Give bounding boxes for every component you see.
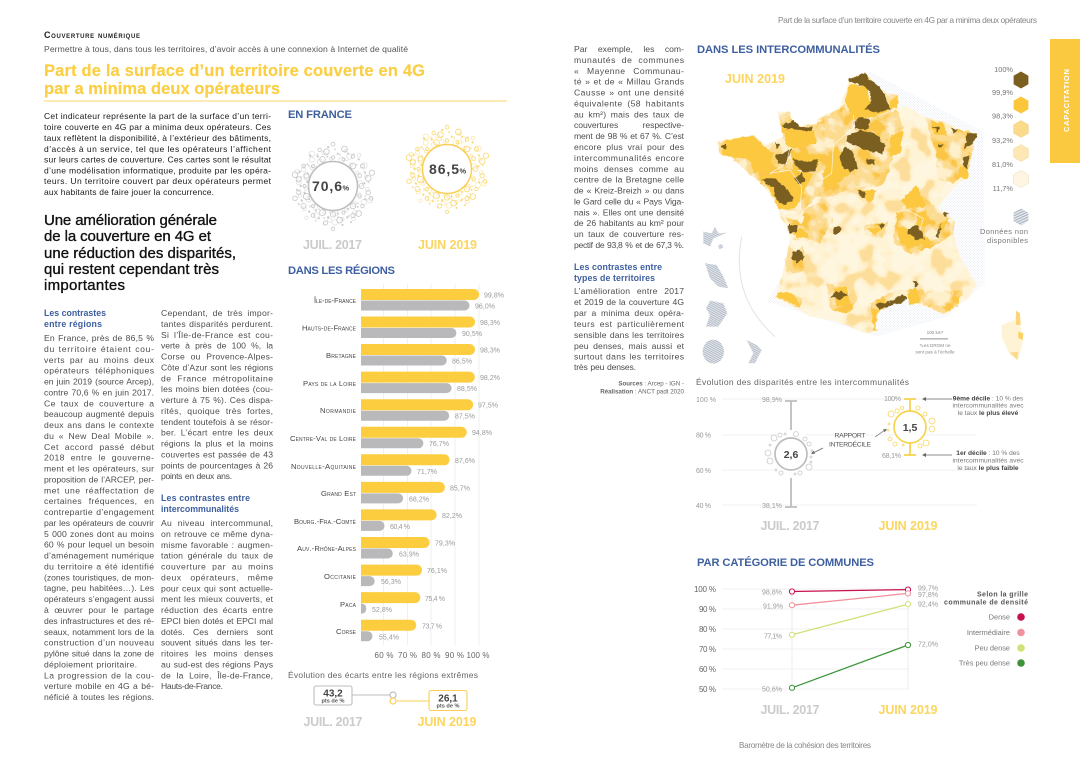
text column 2: Hauts-de-France. (161, 681, 223, 691)
intro paragraph: teurs. Un territoire couvert par deux opérateurs permet (44, 176, 272, 186)
callout: 1er décile: 1er décile : 10 % des (956, 450, 1020, 457)
dumbbell 2017: 38,1% (762, 503, 782, 510)
series: dense: 98,8% (762, 590, 782, 596)
legend item 93.2%: 93,2% (992, 136, 1013, 145)
text column 2: points en deux ans. (161, 471, 232, 481)
text column 3: et 2019 de la couverture 4G (574, 297, 684, 307)
row: Bretagne (326, 344, 500, 366)
dumbbell 2017: 2,6 (784, 449, 798, 461)
row: Centre-Val de Loire (290, 427, 492, 448)
row: Pays de la Loire: 88,5% (457, 386, 477, 393)
text column 2: Corse ou Provence-Alpes- (161, 352, 273, 362)
text column 3: Causse » ont une densité (574, 88, 684, 98)
row: Paca: 52,8% (372, 607, 392, 614)
main heading: une réduction des disparités, (44, 245, 236, 262)
axis labels: 80 % (699, 625, 716, 634)
text column 3: nais ». Elles ont une densité (574, 207, 684, 217)
text column 1: deux ans dans le contexte (44, 420, 154, 430)
text column 3: teurs est particulièrement (574, 319, 685, 329)
date label map: JUIN 2019 (725, 72, 785, 86)
legend item 98.3%: 98,3% (992, 112, 1013, 120)
date label 2017: JUIL. 2017 (760, 519, 820, 533)
text column 1: 60 % pour lequel un besoin (44, 540, 154, 550)
axis labels: 100 % (466, 651, 490, 660)
text column 3 (574, 44, 685, 372)
text column 1: seaux, notamment lors de la (44, 627, 154, 637)
text column 3: le Gard celle du « Pays Viga- (574, 196, 684, 206)
value box 2019: pts de % (436, 704, 460, 710)
axis labels: 70 % (398, 651, 417, 660)
legend item no data: Données non (980, 227, 1028, 236)
line chart legend: Selon la grille (977, 592, 1028, 598)
row: Hauts-de-France (302, 316, 500, 338)
main heading: qui restent cependant très (44, 261, 219, 278)
text column 3: moins denses comme au (574, 164, 684, 174)
text column 2: Au niveau intercommunal, (161, 518, 273, 528)
text column 1: construction d’un nouveau (44, 638, 154, 648)
text column 3: au km²) mais des taux de (574, 109, 684, 119)
text column 1: Les contrastes (44, 308, 106, 318)
axis labels: 60 % (374, 651, 394, 660)
text column 2: de France métropolitaine (161, 373, 273, 383)
text column 3: intercommunalités encore (574, 153, 684, 163)
row: Grand Est: 68,2% (409, 496, 429, 504)
intro paragraph: toire couverte en 4G par a minima deux opérateurs. Ces (44, 122, 271, 132)
row: Nouvelle-Aquitaine: 87,6% (455, 458, 475, 465)
line chart legend (944, 592, 1028, 668)
row: Occitanie: Occitanie (324, 572, 357, 581)
row: Corse: 55,4% (379, 634, 399, 642)
intro paragraph: d’une modélisation informatique, produite par les opéra- (44, 166, 271, 176)
intro paragraph (44, 111, 272, 197)
text column 2: Côte d’Azur sont les régions (161, 362, 273, 372)
text column 3: sensible dans les territoires (574, 330, 684, 340)
footer: Baromètre de la cohésion des territoires (739, 741, 871, 750)
text column 2: souvent situés dans les ter- (161, 638, 273, 648)
legend item no data (980, 208, 1028, 245)
text column 2: couvertes est passée de 43 (161, 449, 273, 459)
heading: intercommunalités: DANS LES INTERCOMMUNALITÉS (697, 43, 881, 56)
text column 1: contrepartie d’engagement (44, 507, 155, 517)
row: Île-de-France (313, 289, 504, 310)
text column 2: tation générale du taux de (161, 551, 273, 561)
text column 2: au sud-est des régions Pays (161, 659, 273, 669)
callout: 1er décile: le taux le plus faible (957, 465, 1019, 472)
series: très peu dense: 50,6% (762, 686, 782, 694)
text column 1: par les opérateurs de couvrir (44, 518, 154, 528)
axis labels: 60 % (699, 665, 716, 674)
axis labels: 70 % (699, 645, 716, 654)
axis labels (374, 651, 490, 660)
text column 3: de « Kreiz-Breizh » ou dans (574, 186, 684, 196)
title: par a minima deux opérateurs (44, 80, 280, 98)
text column 1: Ce taux de couverture a (44, 398, 154, 408)
text column 3: peu denses, mais aussi et (574, 341, 685, 351)
dumbbell 2019 (882, 396, 935, 460)
map scale note (915, 330, 955, 354)
text column 2: verte à près de 100 %, la (161, 341, 273, 351)
legend item 11.7%: 11,7% (993, 184, 1013, 193)
text column 2: rités, quoique très fortes, (161, 406, 273, 416)
text column 2: dotés. Ces derniers sont (161, 627, 274, 637)
intro paragraph: d’accès à un service, tel que les opérateurs l’affichent (44, 144, 272, 154)
text column 2: on retrouve ce même dyna- (161, 529, 273, 539)
row: Bretagne: Bretagne (326, 351, 357, 360)
text column 2 (161, 308, 274, 691)
axis labels: 50 % (699, 685, 716, 694)
map: Corsica (1002, 310, 1023, 360)
legend: dense: Dense (989, 612, 1010, 622)
subheading: écarts: Évolution des écarts entre les régions extrêmes (288, 670, 478, 680)
row: Centre-Val de Loire: Centre-Val de Loire (290, 434, 357, 443)
text column 3: par a minima deux opéra- (574, 308, 684, 318)
text column 2: Les contrastes entre (161, 493, 250, 503)
disparity chart (696, 396, 1024, 510)
date label 2017: JUIL. 2017 (303, 238, 362, 252)
subtitle: Permettre à tous, dans tous les territoires, d’avoir accès à une connexion à Internet de qualité (44, 44, 408, 54)
main heading (44, 212, 236, 294)
callout: rapport interdécile: RAPPORT (834, 432, 866, 440)
text column 1: certaines fréquences, en (44, 496, 154, 506)
date label 2017: JUIL. 2017 (760, 703, 820, 717)
axis labels (696, 397, 716, 510)
value box 2019 (429, 690, 467, 710)
date label 2019: JUIN 2019 (418, 715, 477, 729)
text column 1: pylône situé dans la zone de (44, 648, 154, 658)
intro paragraph: aux habitants de faire jouer la concurrence. (44, 187, 214, 197)
intro paragraph: sur leurs cartes de couverture. Ces cartes sont le résultat (44, 154, 272, 164)
row: Occitanie: 76,1% (427, 568, 447, 575)
axis labels: 90 % (699, 605, 716, 614)
text column 2: Cependant, de très impor- (161, 308, 273, 318)
row: Hauts-de-France: 98,3% (480, 320, 500, 327)
text column 1: Cet accord passé début (44, 442, 155, 452)
callout: 1er décile (922, 450, 1024, 472)
text column 1: met une réaffectation de (44, 485, 154, 495)
intro paragraph: taux reflètent la disponibilité, à l’extérieur des bâtiments, (44, 133, 271, 143)
text column 2: couverture par au moins (161, 562, 273, 572)
running header: Part de la surface d’un territoire couverte en 4G par a minima deux opérateurs (778, 15, 1037, 25)
text column 2: ber. L’écart entre les deux (161, 428, 274, 438)
text column 3: centre de la Bretagne celle (574, 175, 684, 185)
text column 2: ment les mieux couverts, et (161, 594, 274, 604)
map legend (980, 65, 1028, 245)
text column 2: régions la plus et la moins (161, 439, 273, 449)
text column 1: du territoire étaient cou- (44, 344, 154, 354)
heading: catégorie de communes: PAR CATÉGORIE DE COMMUNES (697, 556, 875, 569)
axis labels: 100 % (696, 397, 716, 404)
intro paragraph: Cet indicateur représente la part de la surface d’un terri- (44, 111, 271, 121)
legend: peu dense: Peu dense (975, 644, 1010, 652)
row: Hauts-de-France: Hauts-de-France (302, 324, 357, 332)
row: Centre-Val de Loire: 94,8% (472, 430, 492, 437)
text column 1: en juin 2019 (source Arcep), (44, 376, 154, 386)
text column 2: intercommunalités (161, 504, 239, 514)
text column 3: de 26 habitants au km² pour (574, 218, 684, 228)
text column 3: très peu denses. (574, 362, 636, 372)
text column 1: des infrastructures et des ré- (44, 616, 154, 626)
text column 2: points de pourcentages à 26 (161, 460, 273, 470)
text column 2: pour ceux qui sont actuelle- (161, 583, 273, 593)
text column 1: ment et les opérateurs, sur (44, 464, 154, 474)
heading: dans les régions: DANS LES RÉGIONS (288, 264, 396, 277)
line chart legend: communale de densité (944, 600, 1028, 606)
series: peu dense (764, 602, 938, 640)
legend: très peu dense: Très peu dense (959, 658, 1010, 668)
text column 3: encore plus vrai pour des (574, 142, 684, 152)
row: Bretagne: 86,5% (452, 358, 472, 366)
text column 3: un taux de couverture res- (574, 229, 684, 239)
row: Hauts-de-France: 90,5% (462, 331, 482, 338)
legend: intermédiaire: Intermédiaire (967, 628, 1010, 637)
bar chart: régions (290, 284, 504, 660)
row: Paca: 75,4 % (425, 596, 445, 603)
text column 3: pectif de 93,8 % et de 67,3 %. (574, 240, 684, 250)
map: overseas territories (703, 227, 775, 364)
text column 1: à œuvrer pour le partage (44, 605, 154, 615)
side tab: CAPACITATION (1062, 69, 1071, 132)
legend item 81.0% (992, 160, 1028, 188)
text column 3: surtout dans les territoires (574, 352, 684, 362)
text column 2: misme favorable : augmen- (161, 540, 273, 550)
map scale note: 100 km* (927, 330, 944, 335)
text column 1: néficié à toutes les régions. (44, 692, 154, 702)
row: Centre-Val de Loire: 76,7% (429, 441, 449, 448)
text column 1: contre 70,6 % en juin 2017. (44, 387, 154, 397)
text column 1: (zones touristiques, de mon- (44, 572, 154, 582)
text column 2: tendent toutefois à se résor- (161, 417, 273, 427)
side tab (1050, 39, 1080, 163)
text column 1: tagne, peu habitées…). Les (44, 583, 154, 593)
text column 2: verture à 75 %). Ces dispa- (161, 395, 273, 405)
row: Auvergne-Rhône-Alpes: Auv.-Rhône-Alpes (297, 544, 357, 553)
row: Normandie (320, 399, 498, 421)
text column 1: du « New Deal Mobile ». (44, 431, 154, 441)
value box 2017: pts de % (321, 698, 345, 704)
text column 2: deux opérateurs, même (161, 572, 273, 582)
text column 3: ment de 98 % et 67 %. C’est (574, 131, 685, 141)
row: Auvergne-Rhône-Alpes (297, 537, 455, 558)
legend item 98.3% (992, 112, 1028, 138)
section label: Couverture numérique (44, 30, 140, 40)
callout: 9e décile: 9ème décile : 10 % des (953, 396, 1024, 402)
gauge: juillet 2017 (275, 128, 391, 245)
text column 3: couvertures respective- (574, 120, 684, 130)
series: très peu dense (762, 642, 938, 694)
line chart (694, 585, 938, 694)
text column 1: d’aménagement numérique (44, 551, 154, 561)
text column 1: verts par au moins deux (44, 355, 155, 365)
legend item 99.9% (992, 88, 1028, 114)
text column 2: EPCI bien dotés et EPCI mal (161, 616, 273, 626)
text column 1: beaucoup augmenté depuis (44, 409, 154, 419)
text column 1: entre régions (44, 319, 102, 329)
text column 3: équivalente (58 habitants (574, 98, 684, 108)
map of France (717, 70, 985, 337)
axis labels: 90 % (445, 651, 464, 660)
row: Pays de la Loire: Pays de la Loire (303, 379, 357, 388)
row: Pays de la Loire (303, 372, 500, 393)
row: Normandie: Normandie (320, 406, 357, 415)
row: Paca: Paca (340, 600, 357, 609)
legend item no data: disponibles (987, 236, 1028, 245)
text column 1: En France, près de 86,5 % (44, 333, 154, 343)
subheading: disparités: Évolution des disparités entre les intercommunalités (696, 377, 909, 387)
row: Bourgogne-Franche-Comté: 82,2% (442, 513, 462, 520)
legend item 93.2% (992, 136, 1028, 162)
sources: Sources : Arcep - IGN - (618, 380, 684, 388)
text column 2: Si l’Île-de-France est cou- (161, 330, 273, 340)
dumbbell 2019: 1,5 (903, 422, 917, 434)
gauge: juin 2019: % (460, 166, 466, 176)
row: Corse: Corse (336, 627, 357, 636)
map scale note: sont pas à l’échelle (915, 350, 955, 354)
gauge: juillet 2017: % (342, 184, 350, 192)
callout: 9e décile: intercommunalités avec (952, 402, 1024, 410)
series: peu dense: 77,1% (764, 634, 782, 640)
series: très peu dense: 72,0% (918, 642, 938, 648)
main heading: importantes (44, 277, 125, 294)
row: Bourgogne-Franche-Comté: Bourg.-Fra.-Comté (294, 517, 357, 526)
axis labels: 80 % (696, 432, 711, 440)
text column 1: proposition de l’ARCEP, per- (44, 474, 154, 484)
value box 2017: 43,2 (323, 688, 343, 700)
text column 3: té » et de « Millau Grands (574, 77, 684, 87)
text column 1: verture mobile en 4G a bé- (44, 681, 154, 691)
sources: Réalisation : ANCT padt 2020 (600, 388, 685, 396)
row: Corse (336, 620, 442, 642)
text column 1: 5 000 zones dont au moins (44, 529, 154, 539)
row: Normandie: 87,5% (455, 414, 475, 420)
title: Part de la surface d’un territoire couverte en 4G (44, 62, 425, 80)
row: Grand Est (321, 482, 470, 504)
dumbbell 2019: 100% (884, 396, 901, 403)
text column 1 (44, 308, 155, 702)
gauge: juillet 2017: 70,6 (312, 178, 342, 194)
callout: 9e décile: le taux le plus élevé (958, 410, 1019, 417)
main heading: Une amélioration générale (44, 212, 217, 229)
dumbbell 2017 (762, 397, 815, 510)
text column 2: les moins bien dotées (cou- (161, 384, 273, 394)
text column 1: 2018 entre le gouverne- (44, 453, 154, 463)
row: Nouvelle-Aquitaine: 71,7% (417, 469, 437, 476)
value box 2017 (314, 686, 352, 705)
map scale note: *Les DROM ne (920, 343, 951, 348)
row: Corse: 73,7 % (422, 624, 442, 630)
axis labels: 60 % (696, 468, 711, 475)
callout: 9e décile (922, 396, 1024, 417)
row: Paca (340, 592, 445, 614)
dumbbell 2017: 98,9% (762, 397, 782, 404)
row: Nouvelle-Aquitaine (291, 454, 475, 476)
gauge: juin 2019: 86,5 (429, 161, 459, 177)
text column 3: munautés de communes (574, 55, 684, 65)
series: dense (762, 586, 938, 596)
text column 1: La progression de la cou- (44, 670, 154, 680)
series: intermédiaire: 91,9% (763, 604, 783, 610)
title (44, 62, 425, 98)
heading: en France: EN FRANCE (288, 109, 353, 121)
row: Occitanie: 56,3% (381, 579, 401, 586)
row: Île-de-France: 99,8% (484, 292, 504, 300)
row: Île-de-France: Île-de-France (313, 296, 357, 305)
text column 1: opérateurs téléphoniques (44, 366, 154, 376)
text column 2: réduction des écarts entre (161, 605, 273, 615)
series: dense: 99,7% (918, 586, 938, 592)
legend item 100% (994, 65, 1028, 88)
text column 1: du territoire a été identifié (44, 562, 154, 572)
row: Normandie: 97,5% (478, 402, 498, 410)
axis labels: 80 % (422, 651, 440, 660)
text column 3: L’amélioration entre 2017 (574, 286, 684, 296)
axis labels (694, 585, 716, 694)
main heading: de la couverture en 4G et (44, 228, 212, 245)
axis labels: 40 % (696, 503, 711, 510)
text column 2: ritoires les moins denses (161, 649, 273, 659)
text column 1: déploiement prioritaire. (44, 659, 137, 669)
text column 3: « Mayenne Communau- (574, 66, 684, 76)
row: Bourgogne-Franche-Comté: 60,4 % (390, 524, 410, 531)
text column 3: types de territoires (574, 273, 655, 283)
sources (600, 380, 685, 396)
text column 3: Les contrastes entre (574, 262, 662, 272)
row: Occitanie (324, 565, 447, 586)
series: peu dense: 92,4% (918, 602, 938, 608)
date label 2019: JUIN 2019 (878, 519, 938, 533)
legend item 81.0%: 81,0% (992, 160, 1013, 169)
text column 2: tantes disparités perdurent. (161, 319, 273, 329)
date label 2019: JUIN 2019 (418, 238, 477, 252)
date label 2017: JUIL. 2017 (304, 715, 363, 729)
axis labels: 100 % (694, 585, 716, 594)
gap chart (314, 686, 467, 710)
gauge: juin 2019 (389, 111, 505, 228)
value box 2019: 26,1 (438, 694, 458, 704)
dumbbell 2019: 68,1% (882, 453, 901, 460)
text column 1: opérateurs s’engagent aussi (44, 594, 154, 604)
callout: rapport interdécile: INTERDÉCILE (829, 440, 871, 448)
row: Grand Est: 85,7% (450, 486, 470, 492)
row: Grand Est: Grand Est (321, 489, 356, 498)
legend item 99.9%: 99,9% (992, 88, 1013, 97)
row: Pays de la Loire: 98,2% (480, 375, 500, 382)
date label 2019: JUIN 2019 (878, 703, 938, 717)
row: Île-de-France: 96,0% (475, 304, 495, 310)
row: Auvergne-Rhône-Alpes: 63,9% (399, 552, 419, 558)
row: Nouvelle-Aquitaine: Nouvelle-Aquitaine (291, 462, 357, 471)
callout: 1er décile: intercommunalités avec (952, 458, 1024, 464)
series: intermédiaire (763, 591, 938, 610)
row: Bretagne: 98,3% (480, 348, 500, 354)
text column 2: de la Loire, Île-de-France, (161, 670, 273, 680)
text column 3: Par exemple, les com- (574, 44, 684, 54)
series: intermédiaire: 97,8% (918, 592, 938, 599)
legend item 100%: 100% (994, 65, 1013, 74)
row: Auvergne-Rhône-Alpes: 79,3% (435, 540, 455, 548)
callout: rapport interdécile (811, 429, 887, 454)
row: Bourgogne-Franche-Comté (294, 509, 462, 531)
